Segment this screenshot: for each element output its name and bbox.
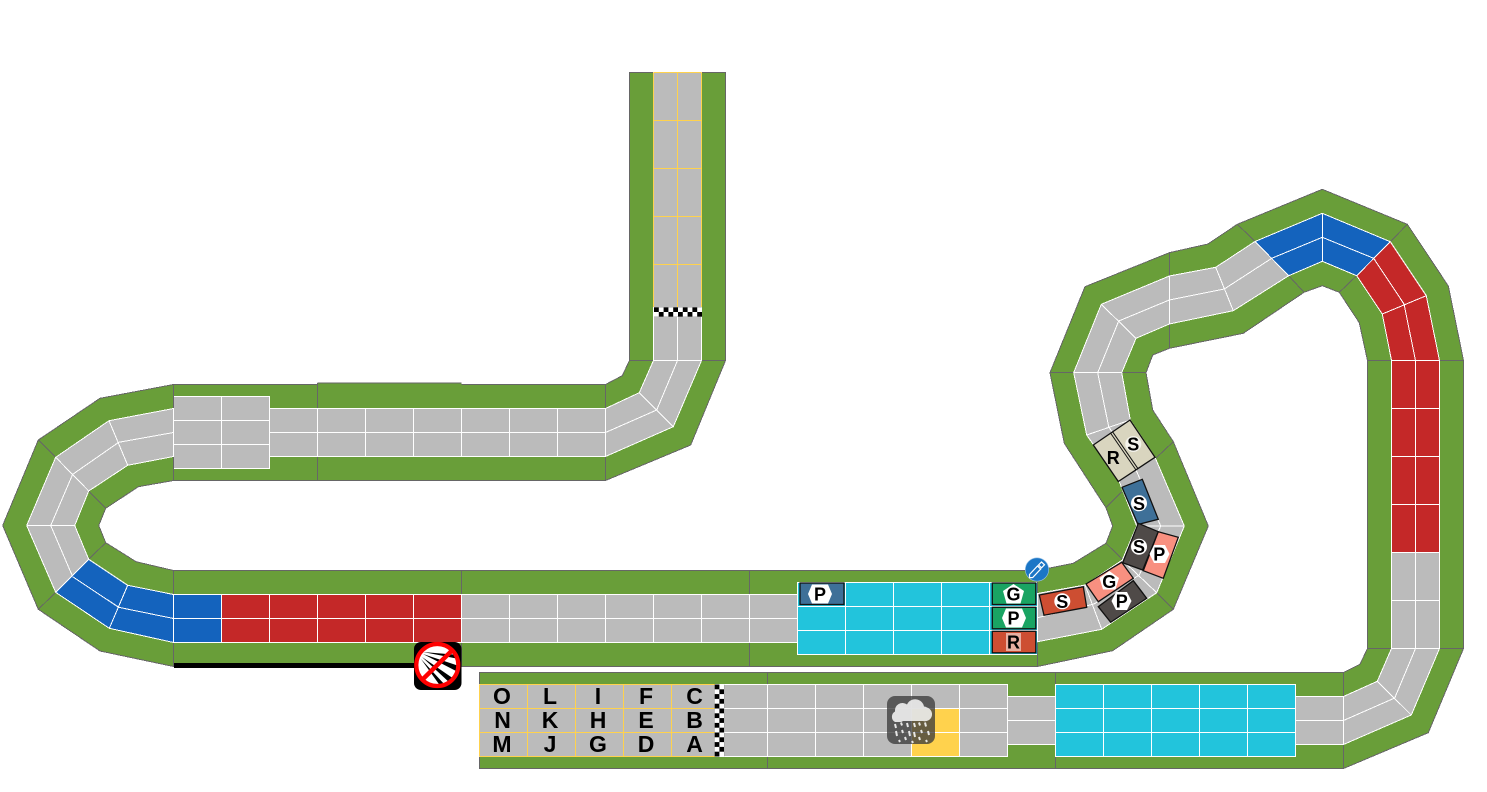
token pair: R and S bbox=[1093, 420, 1155, 482]
token: red R bbox=[992, 631, 1036, 653]
token: blue P bbox=[800, 583, 844, 604]
blue zone: left hairpin exit bbox=[56, 559, 174, 642]
track section: right side sweeping curves bbox=[1038, 189, 1464, 667]
grid letters: H bbox=[590, 707, 606, 733]
grid letters: E bbox=[638, 707, 654, 733]
token: dark P: P bbox=[1116, 592, 1128, 612]
red zone: right straight bbox=[1392, 360, 1440, 552]
grid letters: B bbox=[686, 707, 703, 733]
grid letters bbox=[492, 683, 703, 757]
checkered line: top bbox=[654, 307, 702, 317]
icon: no overtaking bbox=[414, 642, 462, 690]
cyan pit area: main straight bbox=[798, 582, 1038, 654]
track section: left hairpin bbox=[3, 384, 174, 666]
grid letters: O bbox=[493, 683, 511, 709]
grid letters: I bbox=[595, 683, 601, 709]
token: blue S: S bbox=[1133, 494, 1145, 514]
blue zone: straight bbox=[174, 594, 222, 642]
grid letters: N bbox=[494, 707, 511, 733]
token: green G bbox=[992, 583, 1036, 604]
track section: right vertical straight bbox=[1368, 360, 1464, 648]
track section: bottom straight bbox=[480, 672, 1344, 768]
grid letters: G bbox=[589, 731, 607, 757]
token: dark S bbox=[1123, 523, 1158, 570]
starting grid bbox=[480, 683, 715, 757]
yellow weather tiles bbox=[912, 708, 960, 756]
grid letters: C bbox=[686, 683, 703, 709]
token: red S bbox=[1039, 587, 1087, 615]
checkered line: start bbox=[715, 684, 724, 756]
token: salmon P: P bbox=[1153, 544, 1165, 564]
token: salmon G: G bbox=[1102, 572, 1116, 592]
red zone: upper right curve bbox=[1357, 242, 1440, 360]
token: salmon P bbox=[1143, 532, 1178, 578]
grid letters: F bbox=[639, 683, 653, 709]
token pair: R and S: R bbox=[1107, 448, 1120, 468]
grid letters: M bbox=[492, 731, 512, 757]
token pair: R and S: S bbox=[1127, 434, 1139, 454]
track section: lower main straight bbox=[174, 570, 1038, 666]
wide three-lane grey area bbox=[174, 396, 270, 468]
grid letters: A bbox=[686, 731, 703, 757]
grey three-lane road bbox=[480, 684, 1008, 756]
icon: blue repair tube bbox=[1025, 558, 1049, 581]
token: blue S bbox=[1122, 479, 1158, 524]
track section: upper straight bbox=[174, 383, 606, 480]
token: red R: R bbox=[1007, 632, 1020, 652]
token: blue P: P bbox=[814, 584, 826, 604]
icon: rain weather bbox=[887, 696, 935, 744]
cyan pit area: bottom straight bbox=[1056, 684, 1296, 756]
token: green G: G bbox=[1006, 584, 1021, 604]
blue zone: top of right curve bbox=[1255, 213, 1390, 276]
grid letters: J bbox=[544, 731, 556, 757]
grid letters: L bbox=[543, 683, 557, 709]
grid letters: K bbox=[542, 707, 559, 733]
track section: lower right curve bbox=[1344, 648, 1464, 768]
red zone: straight bbox=[222, 594, 462, 642]
track section: top pit straight bbox=[630, 72, 726, 360]
token: salmon G bbox=[1086, 562, 1133, 602]
token: green P: P bbox=[1007, 608, 1020, 628]
token: red S: S bbox=[1056, 592, 1068, 612]
track section: upper-left curve from pit straight bbox=[606, 360, 726, 480]
token: green P bbox=[992, 607, 1036, 629]
no overtaking boundary bar bbox=[174, 663, 415, 668]
token: dark S: S bbox=[1133, 537, 1145, 557]
token: dark P bbox=[1098, 581, 1147, 622]
grid letters: D bbox=[638, 731, 654, 757]
